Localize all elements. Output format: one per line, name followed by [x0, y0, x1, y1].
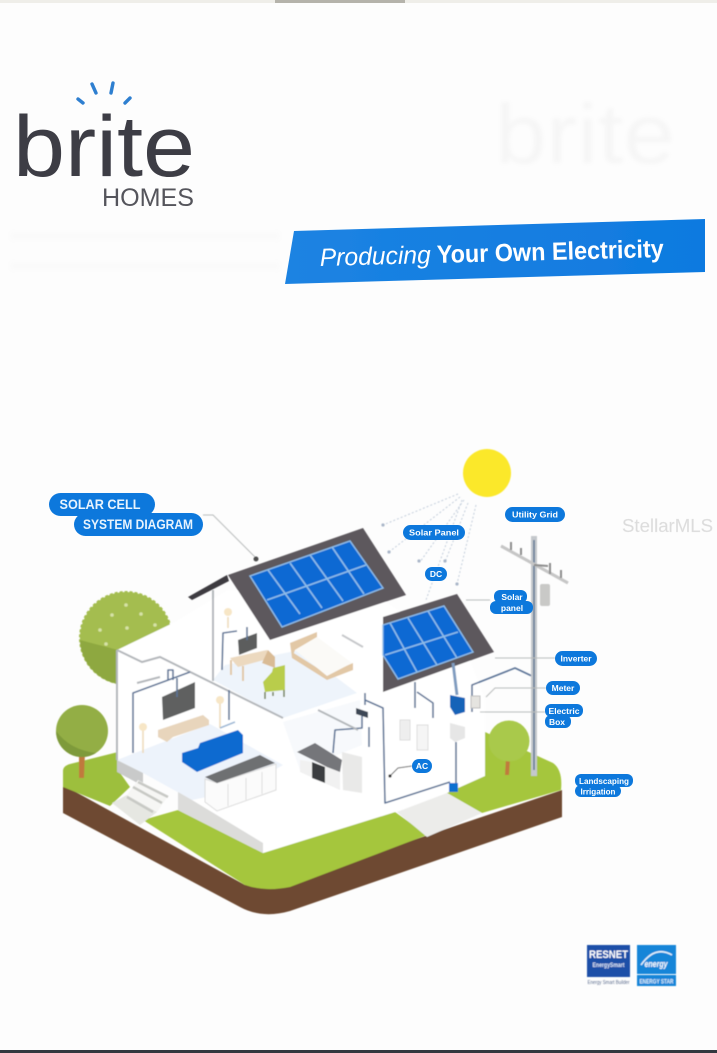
solar house diagram	[56, 449, 568, 914]
second solar array	[383, 606, 473, 679]
label: solar panel top: Solar Panel	[409, 528, 459, 538]
label: dc: DC	[430, 569, 442, 579]
banner title text: Your Own Electricity	[436, 235, 664, 269]
living room furniture	[158, 682, 276, 811]
logo: brite homes	[13, 83, 195, 212]
label: inverter: Inverter	[560, 654, 592, 664]
label: landscaping irrigation: Irrigation	[580, 786, 616, 796]
blue sofa	[182, 730, 243, 772]
roof solar array	[250, 541, 383, 627]
resnet badge: Energy Smart Builder	[588, 980, 630, 986]
lawn left and front	[63, 752, 427, 889]
resnet badge: RESNET	[589, 949, 628, 961]
inverter and meter boxes	[356, 695, 480, 792]
energy star badge: ENERGY STAR	[640, 978, 674, 986]
second roof with solar panels	[383, 594, 494, 692]
ground soil base	[63, 785, 562, 914]
faint show-through from reverse side: brite	[495, 87, 675, 181]
label: landscaping irrigation	[575, 774, 633, 797]
lamps	[139, 608, 232, 753]
title banner	[285, 219, 705, 284]
icon: logo light rays	[78, 83, 130, 103]
front steps	[112, 780, 168, 825]
label: solar panel top	[403, 525, 465, 540]
label: utility grid: Utility Grid	[512, 510, 558, 520]
label: electric box: Box	[549, 717, 565, 727]
wordmark brite: brite	[13, 99, 195, 195]
label: solar panel side: panel	[501, 603, 523, 613]
resnet badge	[587, 945, 630, 986]
resnet badge: EnergySmart	[592, 963, 624, 969]
leader lines	[203, 515, 555, 778]
label: meter: Meter	[552, 683, 575, 693]
energy star badge: energy	[644, 959, 668, 969]
sun	[463, 449, 511, 497]
lawn right	[447, 732, 561, 813]
certification logos	[587, 945, 676, 986]
desk and chair	[230, 633, 285, 699]
house walls and floor	[117, 590, 485, 853]
faint show-through from reverse side	[10, 87, 675, 270]
label: ac	[412, 759, 432, 773]
tree right	[488, 720, 530, 775]
wordmark homes: HOMES	[102, 184, 194, 212]
wiring	[133, 627, 534, 803]
label: solar panel side	[490, 590, 533, 614]
bedroom furniture	[290, 632, 363, 680]
utility pole	[501, 536, 568, 776]
label: landscaping irrigation: Landscaping	[579, 776, 629, 786]
label: ac: AC	[416, 761, 428, 771]
banner title text: Producing	[319, 241, 431, 272]
energy star badge	[637, 945, 676, 986]
kitchen island	[205, 764, 276, 811]
tree left	[56, 705, 108, 778]
label: electric box	[545, 704, 583, 728]
label: dc	[425, 567, 447, 581]
label: solar panel side: Solar	[501, 592, 523, 602]
main roof with solar panels	[188, 528, 406, 640]
label: meter	[546, 681, 580, 695]
label: solar cell system diagram: SYSTEM DIAGRAM	[83, 517, 193, 532]
label: electric box: Electric	[548, 706, 580, 716]
large bush	[80, 592, 172, 684]
sidewalk	[397, 793, 482, 837]
label: solar cell system diagram	[49, 493, 203, 536]
sun rays	[381, 494, 476, 600]
label: inverter	[555, 651, 597, 666]
transformer	[540, 584, 550, 606]
label: solar cell system diagram: SOLAR CELL	[60, 496, 141, 512]
watermark: StellarMLS	[622, 516, 713, 536]
label: utility grid	[505, 507, 565, 522]
kitchen appliances	[297, 743, 362, 793]
